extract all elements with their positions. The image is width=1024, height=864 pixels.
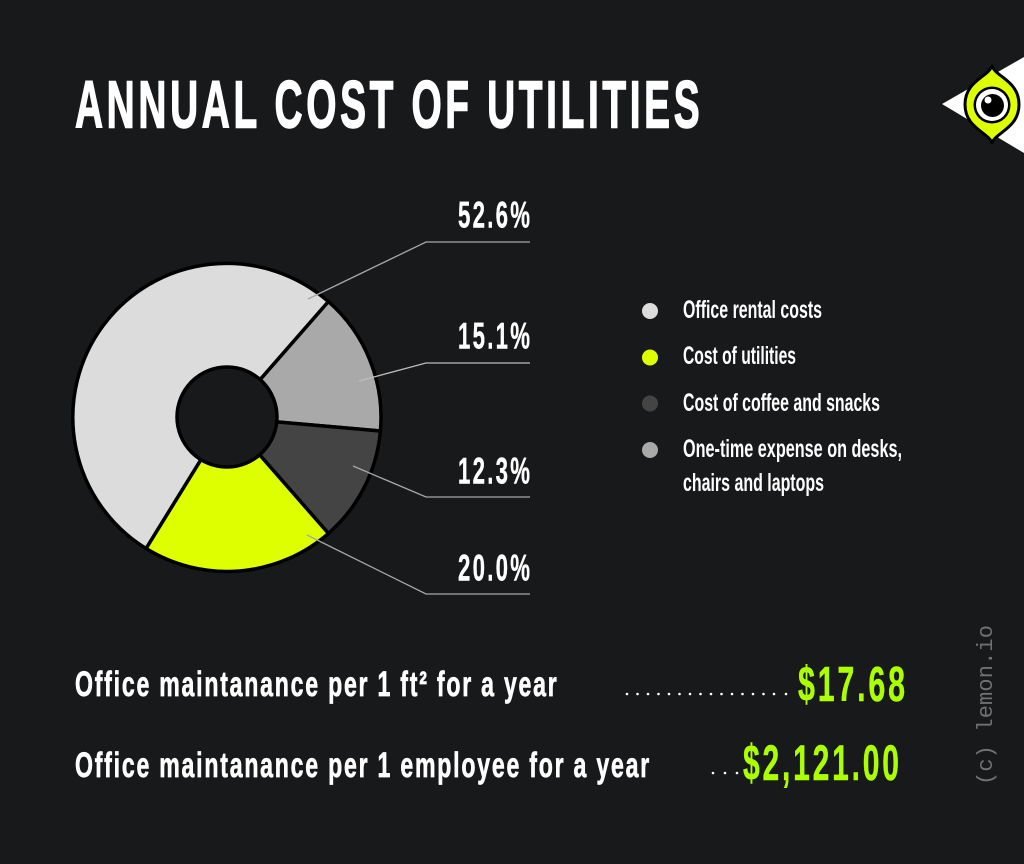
slice: office rental costs 52.6% — [73, 263, 328, 548]
callout: 20.0%: 20.0% — [458, 548, 530, 589]
legend item: coffee and snacks — [642, 389, 880, 417]
stat row: cost per square foot — [75, 657, 905, 712]
legend item: cost of utilities: Cost of utilities — [683, 342, 796, 370]
legend — [642, 296, 902, 497]
logo: lemon eye — [942, 57, 1024, 153]
callout: 12.3%: 12.3% — [458, 451, 530, 492]
slice: cost of utilities 20.0% — [146, 418, 328, 571]
callout: 15.1% — [359, 316, 530, 381]
legend item: coffee and snacks: Cost of coffee and snacks — [683, 389, 880, 417]
donut hole — [177, 367, 277, 467]
callout: 12.3% — [353, 451, 530, 497]
callout: 52.6%: 52.6% — [458, 195, 530, 236]
stat row: cost per square foot: Office maintanance per 1 ft² for a year — [75, 665, 557, 704]
callout: 52.6% — [308, 195, 530, 299]
stat row: cost per employee: Office maintanance per 1 employee for a year — [75, 746, 650, 785]
stat row: cost per employee: $2,121.00 — [743, 735, 899, 791]
stat row: cost per square foot: $17.68 — [798, 657, 905, 712]
legend item: cost of utilities — [642, 342, 796, 370]
legend item: office rental costs — [642, 296, 822, 324]
credit: (c) lemon.io: (c) lemon.io — [974, 625, 999, 785]
legend item: one-time expense — [642, 435, 902, 497]
legend item: office rental costs: Office rental costs — [683, 296, 822, 324]
legend item: one-time expense: One-time expense on desks, — [683, 435, 902, 463]
slice: coffee and snacks 12.3% — [227, 418, 380, 533]
legend item: one-time expense: chairs and laptops — [683, 469, 824, 497]
callout: 20.0% — [307, 535, 530, 594]
callout: 15.1%: 15.1% — [458, 316, 530, 357]
stat row: cost per employee — [75, 735, 899, 791]
slice: one-time expense 15.1% — [227, 302, 381, 431]
title: ANNUAL COST OF UTILITIES — [75, 66, 700, 142]
donut chart — [73, 263, 381, 571]
